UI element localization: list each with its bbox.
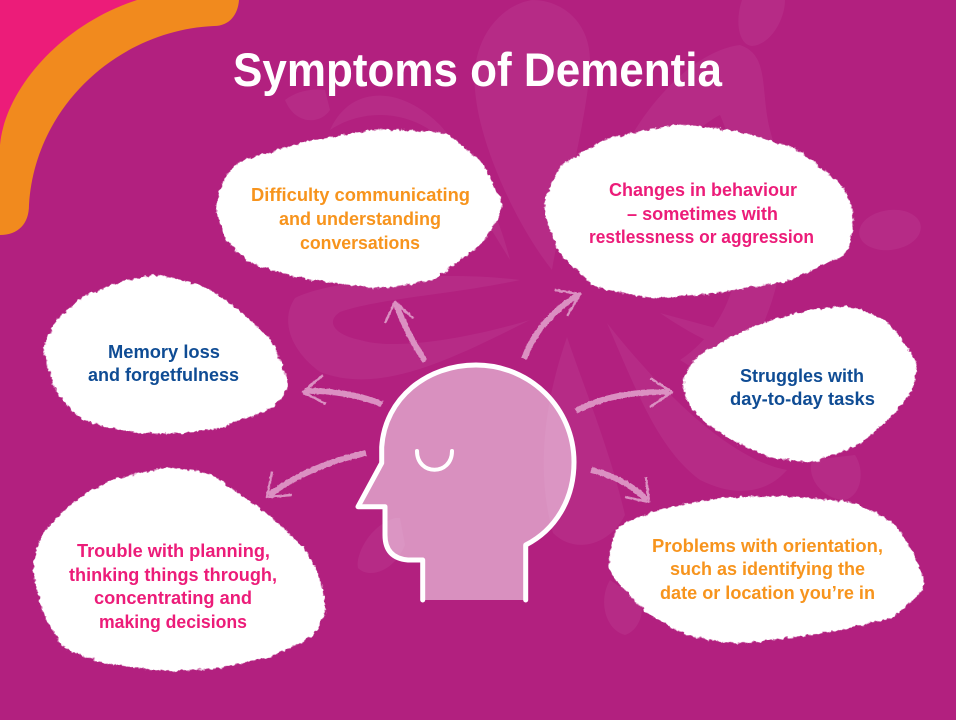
decorative pink corner	[0, 0, 140, 150]
panel: memory bubble	[43, 275, 288, 433]
panel: communication bubble: conversations	[300, 233, 420, 253]
title: Symptoms of Dementia	[233, 43, 723, 96]
watermark flower	[285, 0, 923, 635]
panel: memory bubble: and forgetfulness	[88, 365, 239, 385]
panel: planning bubble	[33, 468, 325, 670]
panel: behaviour bubble: restlessness or aggression	[589, 227, 814, 247]
panel: daily tasks bubble: day-to-day tasks	[730, 389, 875, 409]
panel: communication bubble: Difficulty communicating	[251, 185, 470, 205]
panel: daily tasks bubble	[683, 307, 917, 462]
panel: behaviour bubble: Changes in behaviour	[609, 180, 797, 200]
arrow: to planning	[267, 453, 366, 497]
arrow: to communication	[385, 302, 425, 361]
decorative orange arc	[0, 0, 239, 235]
panel: orientation bubble	[608, 497, 925, 643]
panel: planning bubble: concentrating and	[94, 588, 252, 608]
panel: planning bubble: making decisions	[99, 612, 247, 632]
panel: daily tasks bubble: Struggles with	[740, 366, 864, 386]
panel: communication bubble: and understanding	[279, 209, 441, 229]
arrow: to behaviour	[524, 290, 580, 359]
icon: head profile	[358, 365, 574, 600]
panel: orientation bubble: Problems with orientation,	[652, 536, 883, 556]
arrow: to daily tasks	[576, 378, 672, 411]
arrow: to memory	[303, 375, 382, 404]
panel: memory bubble: Memory loss	[108, 342, 220, 362]
panel: behaviour bubble: – sometimes with	[627, 204, 778, 224]
icon: closed eye	[417, 451, 452, 470]
arrow: to orientation	[591, 470, 649, 502]
panel: orientation bubble: such as identifying the	[670, 559, 865, 579]
panel: communication bubble	[216, 130, 503, 288]
panel: orientation bubble: date or location you’re in	[660, 583, 875, 603]
panel: planning bubble: thinking things through,	[69, 565, 277, 585]
panel: planning bubble: Trouble with planning,	[77, 541, 270, 561]
panel: behaviour bubble	[544, 125, 854, 297]
